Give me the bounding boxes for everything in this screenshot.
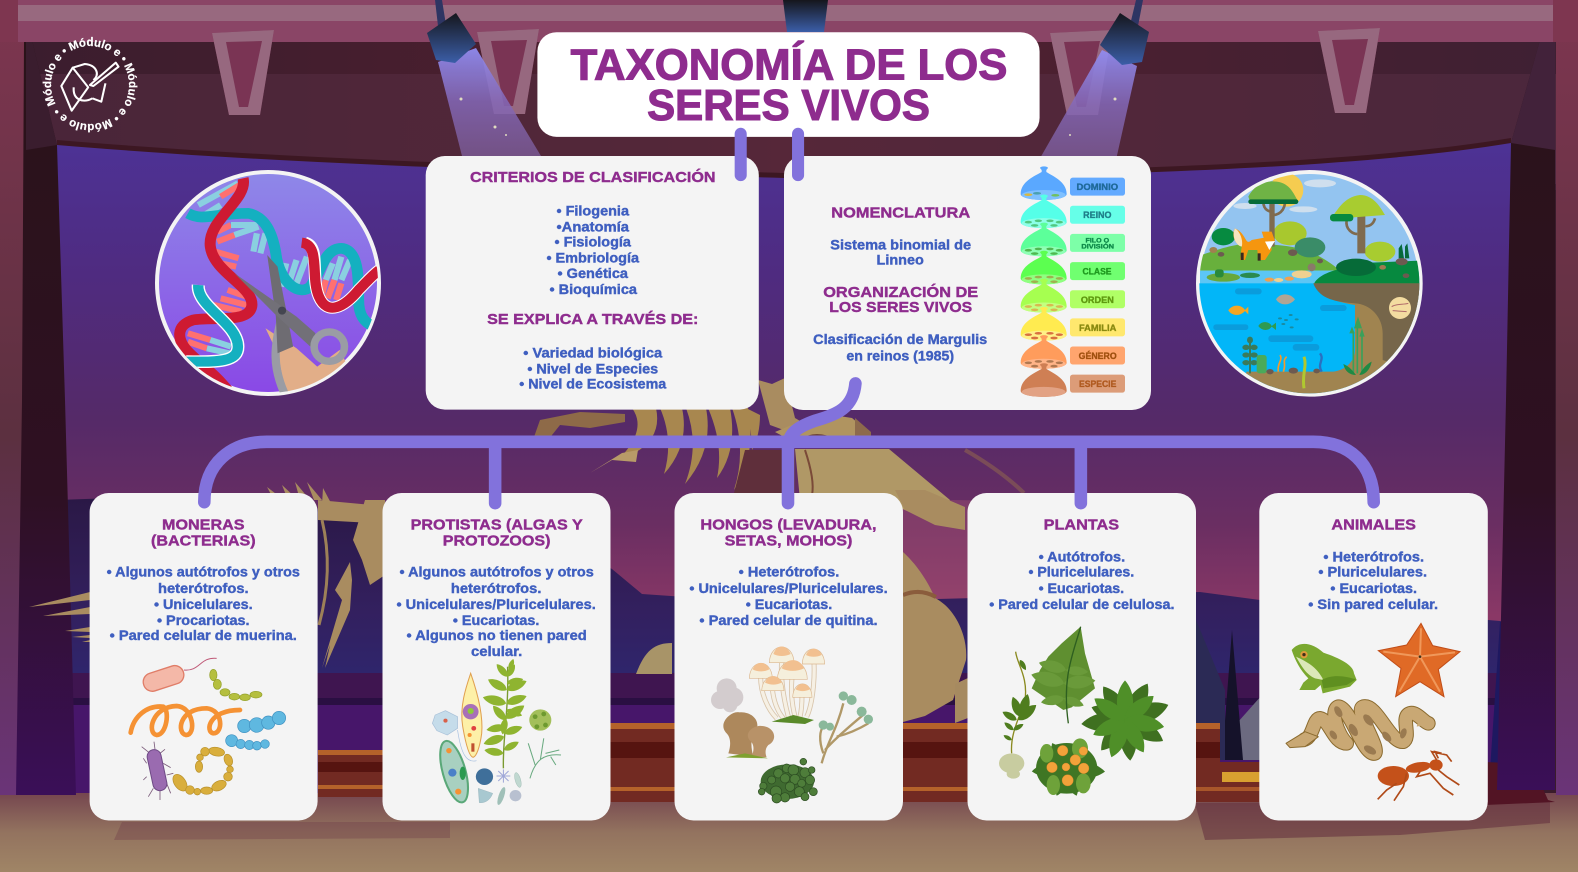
text: plantas: • Pluricelulares. — [1029, 565, 1134, 580]
panel: plantas — [968, 493, 1196, 820]
connector: tree to five kingdoms — [204, 383, 1374, 503]
panel: moneras — [90, 493, 318, 820]
text: animales: • Pluricelulares. — [1318, 565, 1427, 580]
underwater plants — [1242, 337, 1267, 373]
text: hongos: • Unicelulares/Pluricelulares. — [689, 581, 888, 596]
list: criterios: • Fisiología — [555, 235, 631, 250]
illustration: protists and algae — [432, 658, 561, 806]
starfish — [1378, 623, 1460, 697]
text: hongos: SETAS, MOHOS) — [725, 532, 852, 549]
panel: nomenclatura y organización — [784, 156, 1151, 410]
text: moneras: MONERAS — [162, 516, 245, 533]
illustration: animals — [1286, 623, 1460, 801]
trusses — [212, 28, 1380, 115]
rank labels: GÉNERO — [1079, 350, 1117, 361]
illustration: fungi — [711, 646, 873, 803]
text: hongos: HONGOS (LEVADURA, — [700, 516, 877, 533]
text: protistas: PROTOZOOS) — [443, 532, 550, 549]
lily pads and frog — [1207, 273, 1240, 282]
rank labels: ORDEN — [1081, 295, 1114, 305]
panel: protistas — [382, 493, 610, 820]
illustration: plants — [999, 627, 1171, 798]
text: plantas: • Eucariotas. — [1039, 581, 1124, 596]
floor — [0, 793, 1578, 872]
text: nomenclatura: en reinos (1985) — [846, 348, 954, 363]
text: plantas — [989, 516, 1174, 612]
ducks — [1292, 270, 1312, 278]
text: animales: • Sin pared celular. — [1308, 597, 1438, 612]
text: nomenclatura: ORGANIZACIÓN DE — [823, 283, 978, 301]
text: plantas: PLANTAS — [1044, 516, 1119, 533]
text: nomenclatura: Clasificación de Margulis — [813, 332, 988, 347]
side pillars — [0, 0, 26, 795]
ant — [1378, 752, 1459, 801]
text: moneras: heterótrofos. — [158, 581, 249, 596]
fish — [1228, 306, 1248, 315]
list: criterios: • Embriología — [546, 251, 639, 266]
list: criterios: • Bioquímica — [549, 282, 637, 297]
text: protistas — [397, 516, 596, 659]
list: criterios: •Anatomía — [557, 219, 629, 234]
rank labels — [1070, 178, 1125, 393]
illustration: DNA cut by scissors — [157, 172, 379, 395]
heading: criterios: CRITERIOS DE CLASIFICACIÓN — [470, 168, 716, 186]
title box — [537, 32, 1040, 137]
text: nomenclatura: LOS SERES VIVOS — [829, 299, 972, 316]
list: niveles: • Nivel de Especies — [527, 361, 659, 376]
text: plantas: • Pared celular de celulosa. — [989, 597, 1174, 612]
connector: title to upper panels — [741, 134, 798, 175]
logo: Módulo e: Módulo e • Módulo e • Módulo e • Módulo e • — [42, 36, 138, 132]
snake — [1286, 705, 1431, 757]
list: niveles — [519, 345, 667, 391]
text: protistas: • Algunos autótrofos y otros — [400, 565, 594, 580]
list: criterios — [546, 203, 639, 297]
list: criterios: • Genética — [558, 266, 628, 281]
panel: hongos — [674, 493, 903, 820]
text: nomenclatura: Sistema binomial de — [830, 238, 972, 253]
rank labels: ESPECIE — [1079, 379, 1116, 389]
rank labels: CLASE — [1082, 266, 1112, 276]
panel: animales — [1259, 493, 1488, 820]
chart: taxonomic hierarchy bells — [1021, 166, 1125, 397]
text: hongos: • Heterótrofos. — [739, 565, 839, 580]
text: moneras: • Procariotas. — [157, 613, 250, 628]
spotlights — [427, 0, 1149, 160]
list: niveles: • Nivel de Ecosistema — [519, 376, 667, 391]
list: criterios: • Filogenia — [557, 203, 629, 218]
text: animales: • Heterótrofos. — [1323, 550, 1424, 565]
text: animales: ANIMALES — [1331, 516, 1416, 533]
illustration: ecosystem — [1197, 172, 1423, 397]
text: moneras: • Unicelulares. — [154, 597, 253, 612]
rank labels: REINO — [1083, 210, 1111, 220]
dinosaur skeleton — [29, 378, 1024, 723]
stage — [318, 752, 618, 797]
text: nomenclatura: Linneo — [877, 253, 924, 268]
text: protistas: PROTISTAS (ALGAS Y — [411, 516, 583, 533]
heading: se explica: SE EXPLICA A TRAVÉS DE: — [487, 311, 698, 328]
title box: SERES VIVOS — [647, 82, 930, 130]
text: moneras — [107, 516, 300, 643]
text: protistas: • Unicelulares/Pluricelulares. — [397, 597, 596, 612]
text: animales — [1308, 516, 1438, 612]
text: moneras: (BACTERIAS) — [151, 532, 256, 549]
rank labels: DOMINIO — [1076, 182, 1118, 192]
title box: TAXONOMÍA DE LOS — [571, 42, 1007, 90]
beam — [0, 0, 1578, 42]
rank labels: DIVISIÓN — [1081, 242, 1114, 251]
fox — [1233, 228, 1272, 260]
text: moneras: • Pared celular de muerina. — [110, 628, 297, 643]
text: protistas: • Algunos no tienen pared — [407, 628, 587, 643]
text: protistas: • Eucariotas. — [453, 613, 539, 628]
text: hongos: • Pared celular de quitina. — [699, 613, 878, 628]
text: nomenclatura — [813, 204, 988, 363]
text: protistas: celular. — [471, 644, 522, 659]
text: hongos — [689, 516, 888, 628]
frog — [1292, 644, 1357, 693]
text: hongos: • Eucariotas. — [746, 597, 832, 612]
rank labels: FILO O — [1085, 237, 1109, 244]
text: protistas: heterótrofos. — [451, 581, 541, 596]
rank labels: FAMILIA — [1079, 323, 1117, 333]
text: nomenclatura: NOMENCLATURA — [831, 204, 970, 221]
illustration: bacteria — [131, 658, 286, 800]
text: animales: • Eucariotas. — [1330, 581, 1417, 596]
text: moneras: • Algunos autótrofos y otros — [107, 565, 300, 580]
list: niveles: • Variedad biológica — [523, 345, 663, 360]
panel: criterios de clasificación — [426, 156, 759, 410]
text: plantas: • Autótrofos. — [1039, 550, 1125, 565]
